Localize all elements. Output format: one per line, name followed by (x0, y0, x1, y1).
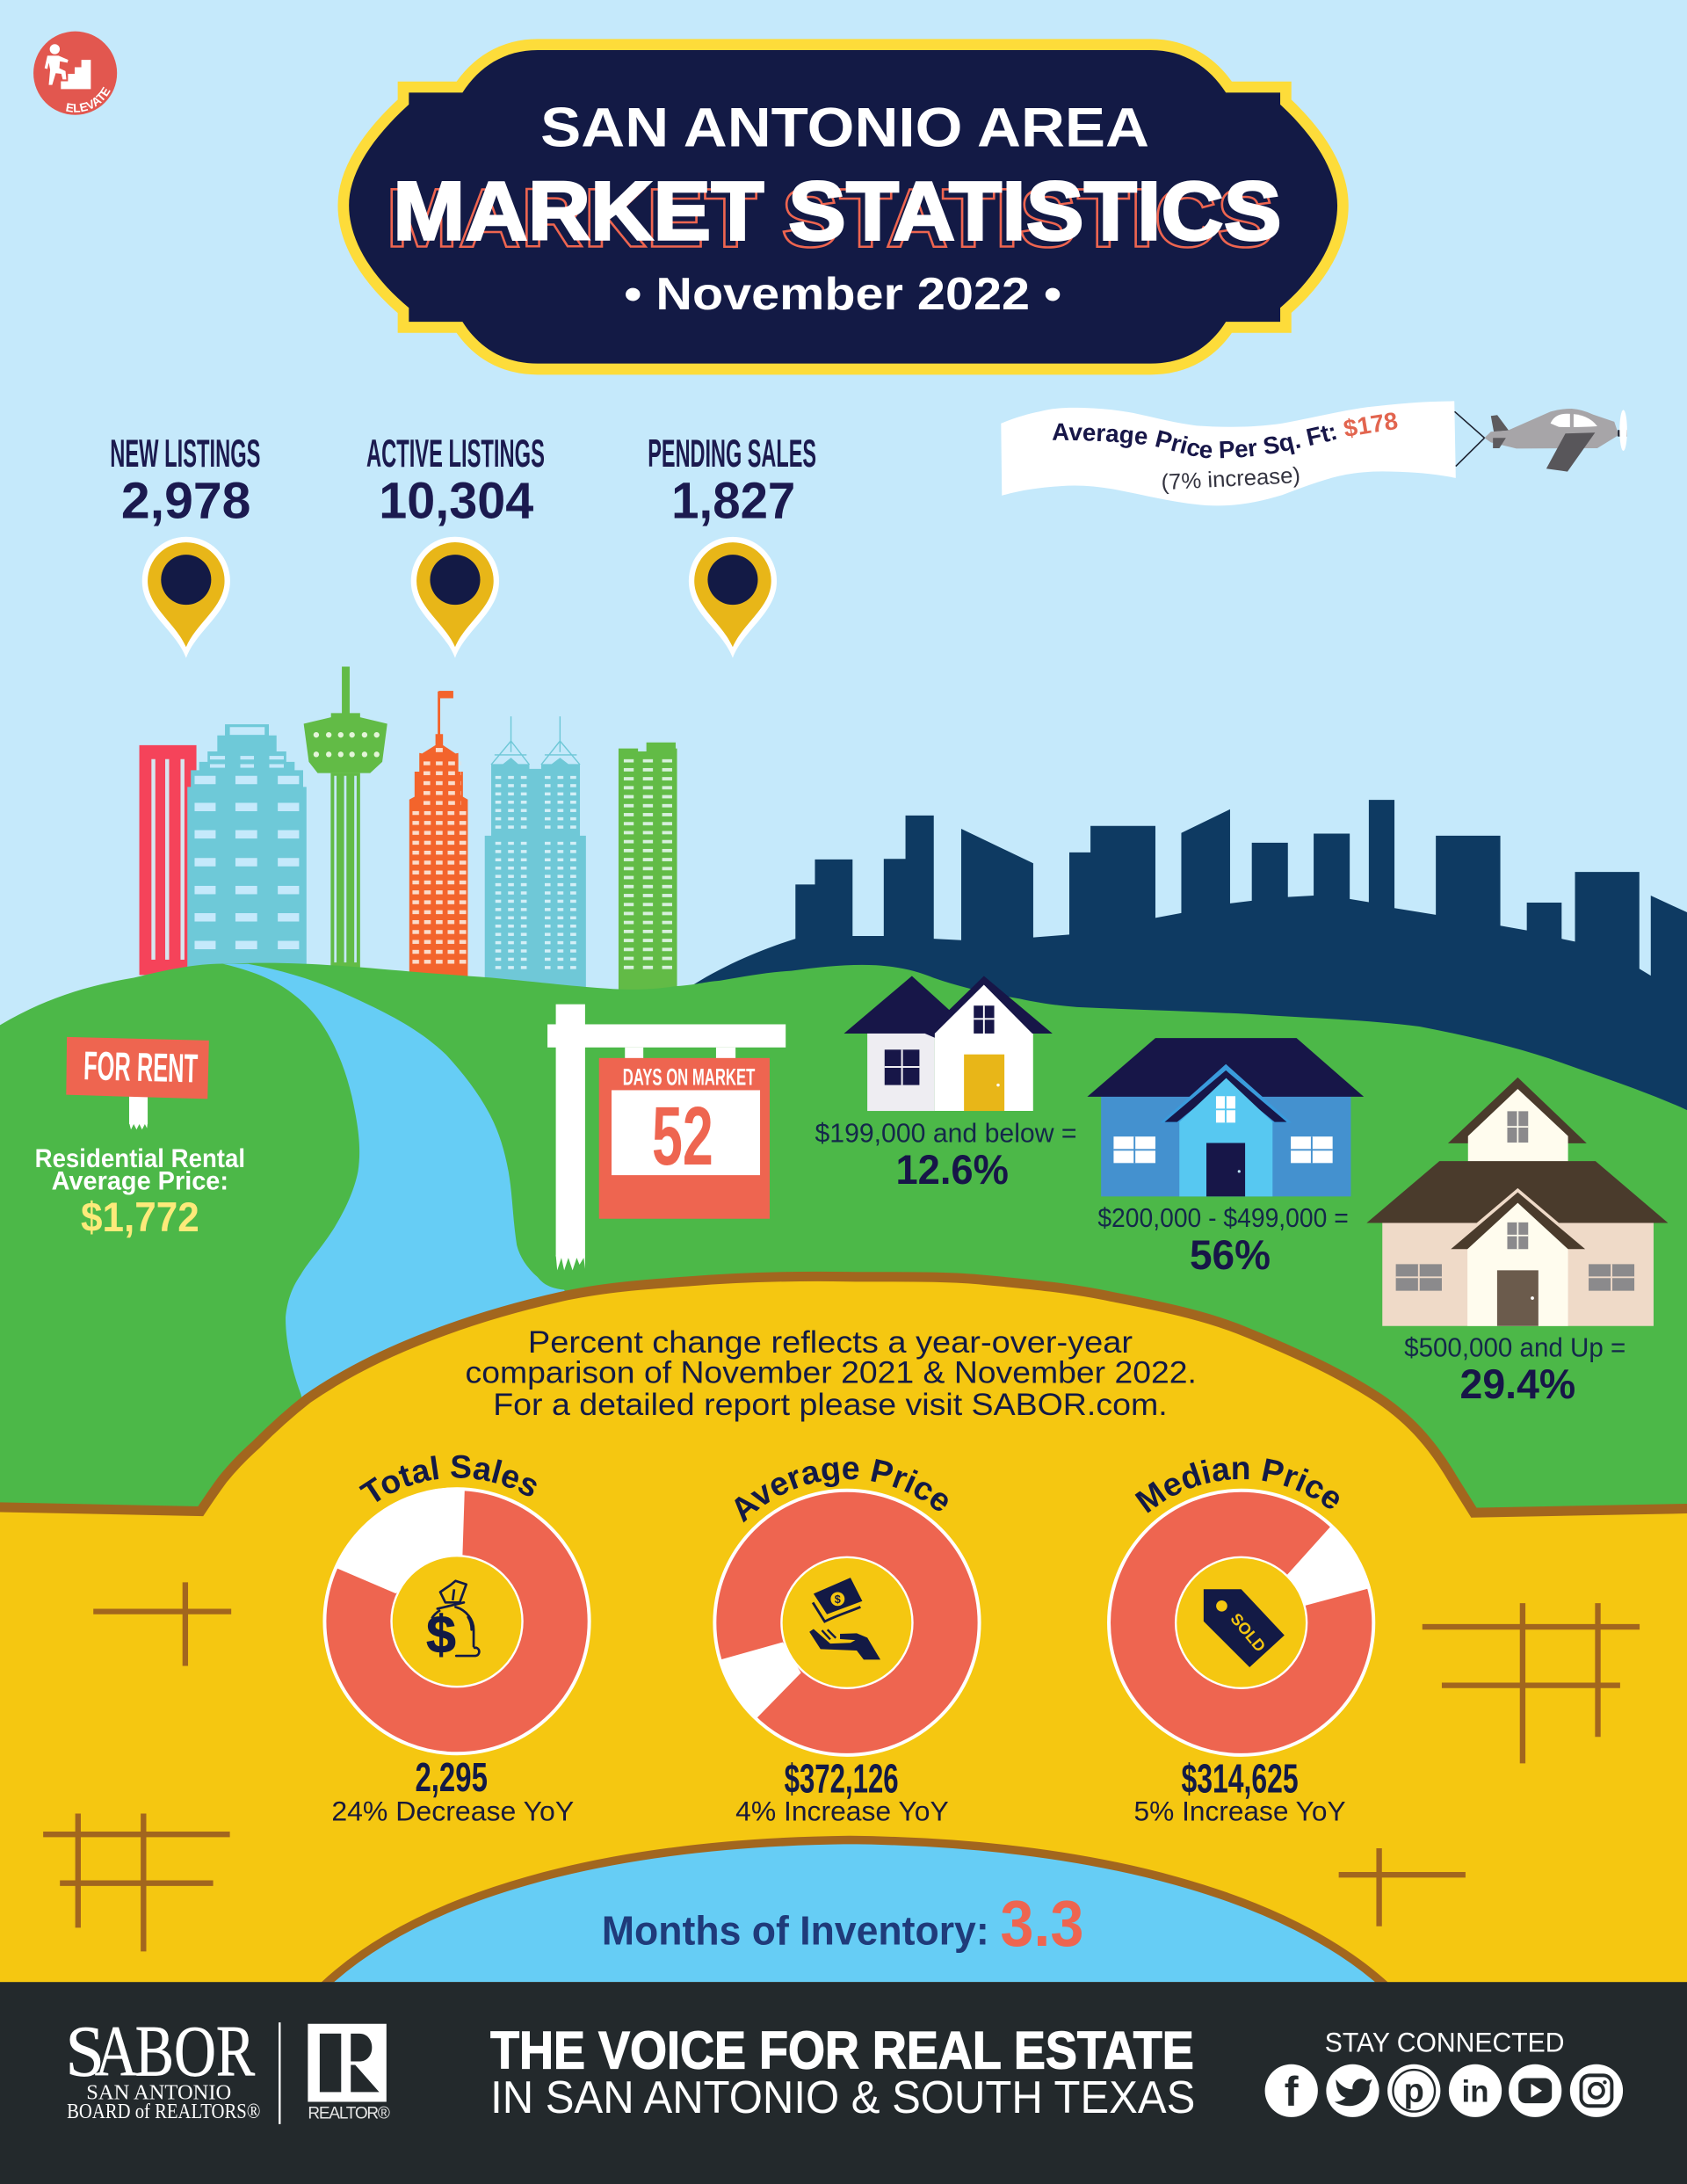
title line: San Antonio Area: SAN ANTONIO AREA (540, 97, 1149, 158)
logo: SABOR: SAN ANTONIO (86, 2080, 231, 2104)
value: median price: $314,625 (1181, 1756, 1299, 1802)
logo: Elevate badge: ELEVATE (66, 86, 111, 112)
donut chart: total sales (324, 1487, 590, 1753)
icon: money and hand: $ (835, 1593, 841, 1606)
logo divider (279, 2022, 280, 2124)
caption: average price change: 4% Increase YoY (735, 1795, 949, 1826)
days on market sign: DAYS ON MARKET (623, 1064, 756, 1091)
text: price band 200k-499k: 56% (1190, 1232, 1271, 1279)
icon: airplane (1455, 409, 1627, 472)
text: percent change note: comparison of November 2021 & November 2022. (466, 1356, 1197, 1390)
building: twin towers (485, 716, 586, 995)
stat: active listings: 10,304 (379, 473, 534, 530)
footer (0, 1982, 1687, 2184)
for rent sign: FOR RENT (83, 1042, 199, 1092)
title line: date: • November 2022 • (624, 269, 1061, 320)
building: green tower (619, 743, 677, 991)
icon: money and hand (809, 1578, 880, 1659)
days on market sign: 52 (652, 1090, 713, 1183)
banner: average price per square foot (1001, 401, 1456, 506)
stat: active listings: ACTIVE LISTINGS (366, 432, 545, 475)
curved heading: Average Price: Average Price (735, 1459, 948, 1522)
stat: new listings: 2,978 (121, 473, 250, 530)
months of inventory: Months of Inventory: (602, 1907, 989, 1953)
logo: SABOR: A (95, 2011, 138, 2091)
building: Tower of the Americas (304, 666, 387, 971)
text: percent change note (466, 1325, 1197, 1422)
text: price band 200k-499k: $200,000 - $499,000 = (1097, 1204, 1349, 1233)
value: average price: $372,126 (785, 1756, 899, 1802)
footer slogan (490, 2020, 1195, 2123)
icon: map pin 2 (411, 537, 499, 658)
icon: facebook (1265, 2064, 1318, 2117)
logo: Elevate badge (33, 32, 118, 115)
stay connected: STAY CONNECTED (1325, 2026, 1564, 2057)
logo: Realtor R: REALTOR® (308, 2105, 390, 2123)
stat: active listings (366, 432, 545, 530)
text: price band 500k and up (1404, 1334, 1625, 1408)
title line: Market Statistics: MARKET STATISTICS (393, 165, 1282, 258)
title shadow: Market Statistics outline: MARKET STATISTICS (386, 172, 1275, 265)
footer slogan: THE VOICE FOR REAL ESTATE (490, 2020, 1194, 2079)
for rent sign (66, 1037, 209, 1129)
text: price band 500k and up: 29.4% (1460, 1361, 1575, 1408)
text: residential rental average price (35, 1144, 245, 1241)
stat: new listings: NEW LISTINGS (110, 432, 260, 475)
text: price band 199k (815, 1120, 1077, 1194)
title plaque (349, 50, 1337, 364)
icon: large house (1366, 1077, 1668, 1326)
caption: total sales change: 24% Decrease YoY (331, 1795, 574, 1826)
text: price band 199k: 12.6% (895, 1147, 1009, 1194)
icon: sold price tag (1204, 1589, 1285, 1667)
icon: sold price tag: SOLD (1227, 1610, 1269, 1655)
panel: median price (1107, 1458, 1376, 1826)
value: total sales: 2,295 (415, 1754, 488, 1800)
panel: average price (713, 1459, 981, 1826)
building: teal stepped tower (187, 724, 307, 975)
icon: money bag: $ (426, 1604, 456, 1664)
text: percent change note: Percent change reflects a year-over-year (528, 1325, 1133, 1360)
icon: blue house (1087, 1038, 1364, 1196)
logo: SABOR: S (66, 2011, 105, 2091)
text: residential rental average price: Residential Rental (35, 1144, 245, 1173)
icon: facebook: f (1285, 2069, 1299, 2115)
caption: median price change: 5% Increase YoY (1134, 1795, 1346, 1826)
icon: small house (844, 976, 1053, 1111)
fence decoration: bottom left (43, 1813, 230, 1951)
text: price band 199k: $199,000 and below = (815, 1120, 1077, 1149)
months of inventory (602, 1887, 1083, 1960)
curved heading: Median Price: Median Price (1135, 1458, 1339, 1513)
days on market sign (547, 1005, 786, 1270)
months of inventory: 3.3 (1000, 1887, 1083, 1960)
donut chart: median price (1109, 1491, 1373, 1755)
fence decoration: top right (1423, 1603, 1640, 1763)
logo: SABOR: BOR (135, 2011, 255, 2091)
ground: yellow field (0, 1276, 1687, 1992)
icon: youtube (1509, 2064, 1561, 2117)
text: residential rental average price: $1,772 (81, 1194, 199, 1241)
donut chart: average price (714, 1491, 980, 1755)
river (223, 964, 585, 1448)
icon: map pin 3 (689, 537, 777, 658)
icon: map pin 1 (142, 537, 230, 658)
fence decoration: bottom right (1339, 1848, 1466, 1926)
text: residential rental average price: Average Price: (52, 1166, 228, 1195)
icon: money bag (426, 1581, 479, 1664)
green hills (0, 963, 1687, 1532)
building: red tower (140, 745, 197, 975)
curved heading: Total Sales: Total Sales (358, 1455, 537, 1502)
building: orange tower with flag (409, 691, 467, 978)
stat: pending sales: PENDING SALES (648, 432, 816, 475)
banner text: price: Average Price Per Sq. Ft: $178 (1053, 413, 1397, 459)
icon: instagram (1570, 2064, 1623, 2117)
text: price band 500k and up: $500,000 and Up = (1404, 1334, 1625, 1363)
stat: pending sales (648, 432, 816, 530)
fence decoration: top left (93, 1582, 231, 1665)
icon: linkedin (1449, 2064, 1502, 2117)
icon: pinterest (1387, 2064, 1440, 2117)
logo: SABOR: BOARD of REALTORS® (67, 2100, 260, 2123)
panel: total sales (322, 1455, 591, 1826)
icon: twitter (1326, 2064, 1379, 2117)
footer slogan: IN SAN ANTONIO & SOUTH TEXAS (490, 2072, 1195, 2123)
banner text: change: (7% increase) (1161, 463, 1301, 495)
logo: SABOR (66, 2011, 260, 2123)
dark city skyline (683, 800, 1687, 1156)
stat: new listings (110, 432, 260, 530)
lake (323, 1840, 1387, 1986)
logo: Realtor R (308, 2024, 390, 2123)
icon: pinterest: p (1404, 2073, 1424, 2109)
text: percent change note: For a detailed report please visit SABOR.com. (493, 1388, 1168, 1422)
stat: pending sales: 1,827 (671, 473, 795, 530)
text: price band 200k-499k (1097, 1204, 1349, 1279)
icon: linkedin: in (1462, 2075, 1489, 2108)
